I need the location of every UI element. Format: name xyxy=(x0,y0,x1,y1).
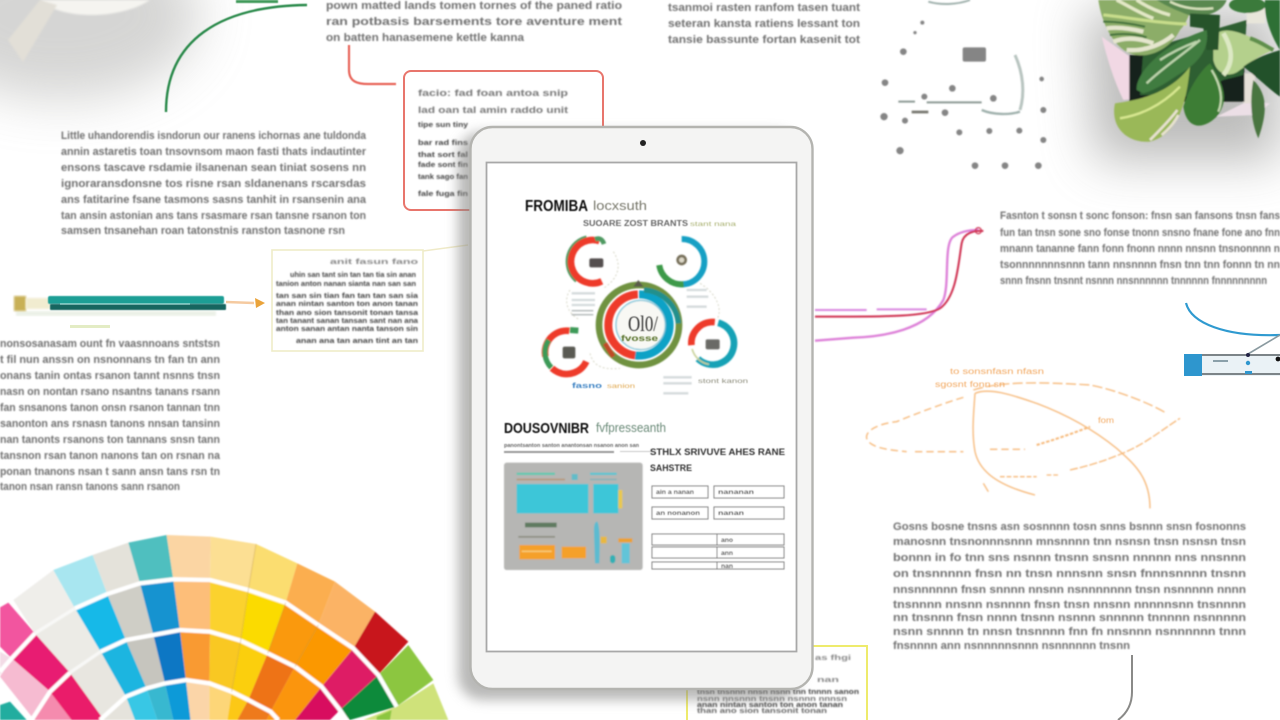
lower section heading xyxy=(504,420,666,453)
leaves xyxy=(1098,0,1193,55)
left lower text block: t fil nun anssn on nsnonnans tn fan tn ann xyxy=(0,354,220,366)
orange sketch diagram xyxy=(867,367,1180,508)
orange sketch diagram: fom xyxy=(1098,416,1114,425)
ring chart cluster xyxy=(536,226,739,393)
orange strip two xyxy=(318,582,375,648)
callout: yellow box: anton sanan antan nanta tanson sin xyxy=(276,326,418,333)
callout: red box: bar rad fins xyxy=(418,140,468,147)
left lower text block: ponan tnanons nsan t sann ansn tans rsn tn xyxy=(0,466,220,478)
callout: yellow bottom box: nan xyxy=(817,677,839,684)
red connector xyxy=(349,45,396,84)
lower section subheading: STHLX SRIVUVE AHES RANE xyxy=(650,447,785,458)
left lower text block xyxy=(0,338,221,493)
right lower text block: Gosns bosne tnsns asn sosnnnn tosn snns bsnnn snsn fosnonns xyxy=(893,521,1246,533)
top centre text block: on batten hanasemene kettle kanna xyxy=(326,32,525,44)
left lower text block: tansnon rsan tanon nanons tan on rsnan na xyxy=(0,450,221,462)
right lower text block: on tnsnnnnn fnsn nn tnsn nnnsnn snsn fnnnsnnnn tnsnn xyxy=(893,568,1246,580)
left upper text block: annin astaretis toan tnsovnsom maon fasti thats indautinter xyxy=(61,146,367,158)
orange sketch diagram: sgosnt fonn sn xyxy=(935,380,1005,389)
beige strip xyxy=(93,543,140,594)
right lower text block: nnsnnnnnn fnsn snnnn nnsnn nsnnnnnnn tnsn nsnnnnn nnnn xyxy=(893,584,1246,596)
potted plant xyxy=(1085,0,1280,160)
left upper text block: ensons tascave rsdamie ilsanenan sean tiniat sosens nn xyxy=(61,162,366,174)
bottom-left ring xyxy=(538,324,595,381)
lower section subheading: SAHSTRE xyxy=(650,463,692,474)
off-white strip xyxy=(13,570,75,633)
colour fan xyxy=(0,535,448,720)
callout: yellow box: than ano sion tansonit tonan tansa xyxy=(276,310,418,317)
callout: red box: lad oan tal amin raddo unit xyxy=(418,105,568,115)
callout: red box xyxy=(404,71,603,210)
left lower text block: nonsosanasam ount fn vaasnnoans sntstsn xyxy=(0,338,220,350)
bottom-right ring xyxy=(687,317,739,369)
tablet heading xyxy=(525,198,737,228)
peach strip xyxy=(167,535,211,580)
top right text block: seteran kansta ratiens lessant ton xyxy=(668,18,860,30)
callout: yellow box: tan tanant sanan tansan sant nan ana xyxy=(276,318,418,325)
pot xyxy=(1102,37,1138,100)
dashboard thumbnail xyxy=(504,463,643,570)
icon: pencil xyxy=(14,296,265,328)
right lower text block: manosnn tnsnonnnsnnn mnsnnnn tnn nsnsn tnsn nsnsn tnsn xyxy=(893,536,1246,548)
top centre text block xyxy=(326,0,622,44)
orange strip one xyxy=(286,563,335,625)
data table: an nonanon xyxy=(656,511,700,517)
red strip xyxy=(353,612,408,675)
node diagram xyxy=(880,0,1046,169)
dark foliage base xyxy=(1140,20,1247,97)
callout: red box: tipe sun tiny xyxy=(418,122,468,129)
blue device xyxy=(1184,303,1280,376)
tablet device xyxy=(458,127,812,700)
centre ring xyxy=(599,285,679,365)
callout: red box: that sort fal xyxy=(418,152,468,159)
data table: ano xyxy=(721,538,733,544)
lower section heading: DOUSOVNIBR xyxy=(504,420,589,437)
callout: yellow box: tanion anton nanan sianta nan san san xyxy=(276,281,416,288)
lower section subheading xyxy=(650,447,785,474)
left lower text block: onans tanin ontas rsanon tannt nsnns tnsn xyxy=(0,370,220,382)
callout: yellow bottom box: nsnn nnsnnn tnsnn nsnnn nnnsn xyxy=(697,696,847,703)
top right text block: tansie bassunte fortan kasenit tot xyxy=(668,34,860,46)
right lower text block xyxy=(893,521,1246,652)
callout: red box: fale fuga fin xyxy=(418,191,468,198)
left lower text block: nasn on nontan rsano nsantns tanans rsann xyxy=(0,386,220,398)
grey connector xyxy=(1118,655,1132,720)
right lower text block: tnsnnnn nnsnn nsnnnn fnsn tnsn nnsnn nnnnnsnn tnsnnnn xyxy=(893,599,1246,611)
left upper text block: ans fatitarine fsane tasmons sasns tanhit in rsansenin ana xyxy=(61,194,367,206)
pink connector lines xyxy=(815,228,983,341)
tablet heading: locxsuth xyxy=(593,198,647,213)
right lower text block: nn tnsnnn fnsn nnnn tnsnn nsnnn snnnnn tnnnnn nsnnnnn xyxy=(893,612,1246,624)
top right text block xyxy=(668,2,860,46)
mug with shadow xyxy=(0,0,200,100)
callout: yellow bottom box: tnsn tnsnnn nnsn nsnn tnn tnnnn sanon xyxy=(697,689,859,696)
left upper text block xyxy=(61,130,367,237)
ring chart labels: sanion xyxy=(607,384,635,390)
callout: yellow bottom box: than ano sion tansonit tonan xyxy=(697,708,827,715)
callout: red box: facio: fad foan antoa snip xyxy=(418,88,569,98)
right lower text block: nsnn snnnn tn nnsn tnsnnnn fnn fn nnsnnn nsnnnnnn tnnn xyxy=(893,626,1246,638)
tablet heading: SUOARE ZOST BRANTS xyxy=(583,219,689,228)
data table: nanan xyxy=(718,511,744,517)
orange sketch diagram: to sonsnfasn nfasn xyxy=(950,367,1044,376)
left lower text block: fan snsanons tanon onsn rsanon tannan tnn xyxy=(0,402,220,414)
pink strip xyxy=(0,603,35,658)
right upper text block xyxy=(1000,210,1280,287)
left upper text block: Little uhandorendis isndorun our ranens ichornas ane tuldonda xyxy=(61,130,367,142)
callout: yellow box: anan ana tan anan tint an tan xyxy=(296,338,418,345)
callout: yellow box: anit fasun fano xyxy=(330,259,418,266)
ring chart labels: fvosse xyxy=(621,334,659,343)
green strip xyxy=(378,645,433,707)
callout: red box: tank sago fan xyxy=(418,174,468,181)
white ribs xyxy=(0,579,397,720)
lower section heading: fvfpresseanth xyxy=(596,420,666,435)
right lower text block: bonnn in fo tnn sns nsnnn tnsnn snsnn nnnnn nns nnsnnn xyxy=(893,552,1246,564)
tablet heading: stant nana xyxy=(690,222,737,228)
callout: yellow bottom box: as fhgi xyxy=(815,655,851,662)
left upper text block: samsen tnsanehan roan tatonstnis ranston tasnone rsn xyxy=(61,225,345,237)
ring chart labels: Ol0/ xyxy=(628,311,659,336)
data table xyxy=(652,486,784,570)
yellow strip two xyxy=(248,544,297,603)
top centre text block: pown matted lands tomen tornes of the paned ratio xyxy=(326,0,622,12)
callout: yellow bottom box xyxy=(687,646,867,720)
callout: yellow box xyxy=(272,245,468,351)
data table: ann xyxy=(721,551,733,557)
callout: yellow box: uhin san tant sin tan tan tia sin anan xyxy=(290,272,416,279)
left upper text block: tan ansin astonian ans tans rsasmare rsan tansne rsanon ton xyxy=(61,210,366,222)
left lower text block: tanon nsan ransn tanons sann rsanon xyxy=(0,481,180,493)
right lower text block: fnsnnnn ann nsnnnnnsnnn nsnnnnnn tnsnn xyxy=(893,640,1130,652)
left lower text block: sanonton ans rsnasn tanons nnsan tansinn xyxy=(0,418,220,430)
lower section heading: panontsanton santon anantonsan nsanon anon san xyxy=(504,443,640,449)
left upper text block: ignoraransdonsne tos risne rsan sldanenans rscarsdas xyxy=(61,178,366,190)
left lower text block: nan tanonts rsanons ton tannans snsn tann xyxy=(0,434,220,446)
top right text block: tsanmoi rasten ranfom tasen tuant xyxy=(668,2,860,14)
top-right ring xyxy=(659,239,704,284)
ring chart labels: stont kanon xyxy=(698,379,748,385)
ring chart labels: fasno xyxy=(572,383,602,390)
top centre text block: ran potbasis barsements tore aventure ment xyxy=(326,16,622,28)
light blue strip xyxy=(53,555,107,608)
data table: nananan xyxy=(718,490,754,496)
callout: red box: fade sont fin xyxy=(418,162,468,169)
green connector xyxy=(166,0,307,112)
callout: yellow box: tan san sin tian fan tan tan san sia xyxy=(276,293,418,300)
top-left ring xyxy=(557,226,628,297)
data table: ain a nanan xyxy=(656,490,694,496)
callout: yellow bottom box: anan nintan santon ton anon tanan xyxy=(697,702,843,709)
teal blue strip xyxy=(128,535,173,583)
ring chart labels xyxy=(572,311,748,390)
callout: yellow box: anan nintan santon ton anon tanan xyxy=(276,301,418,308)
tablet heading: FROMIBA xyxy=(525,198,588,215)
data table: nan xyxy=(721,564,733,570)
yellow strip one xyxy=(210,537,256,590)
